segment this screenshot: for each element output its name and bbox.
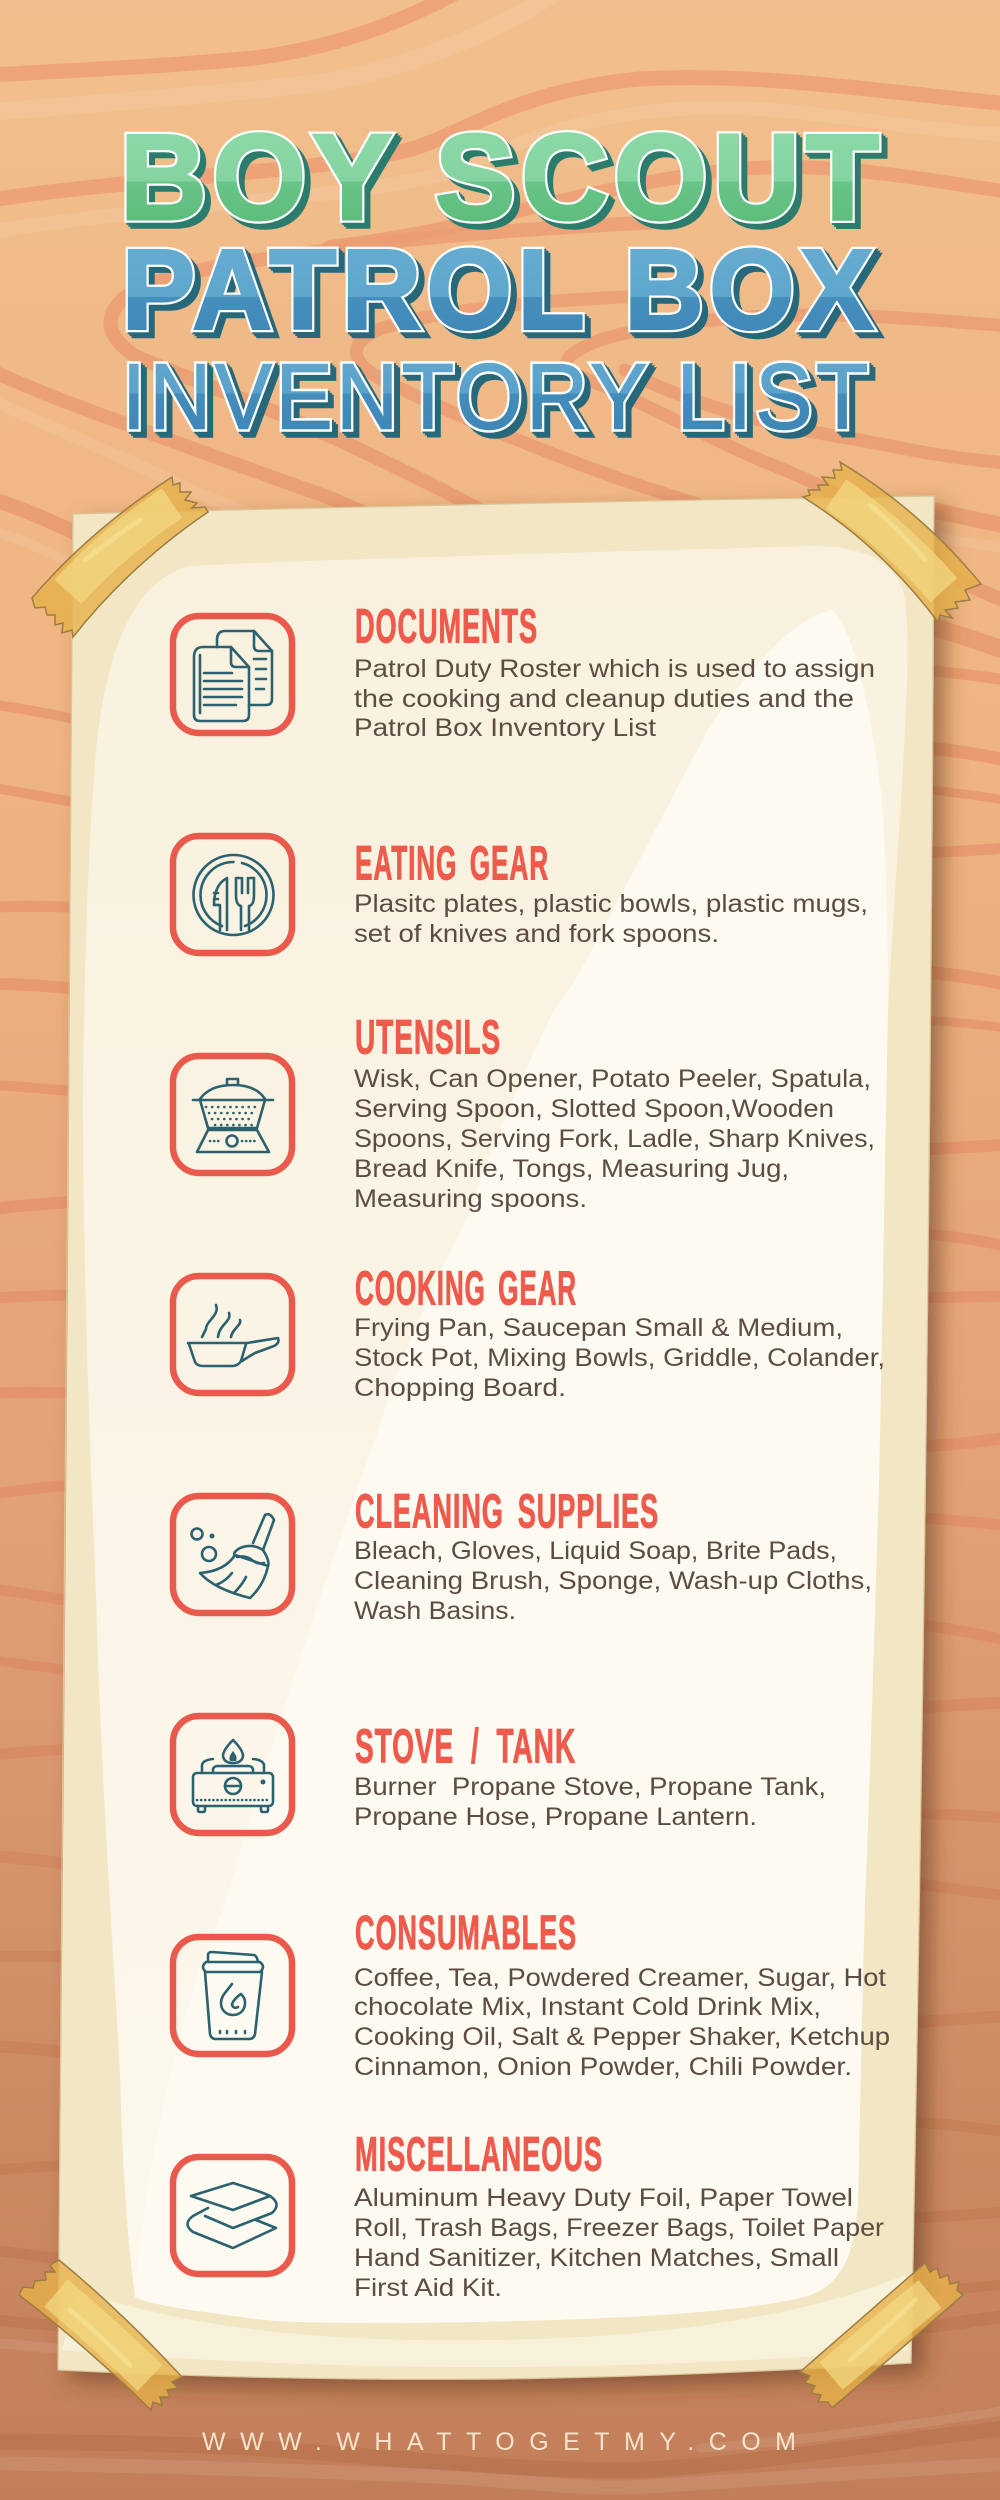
- tape: top left: [32, 477, 208, 637]
- text block: Roll, Trash Bags, Freezer Bags, Toilet Paper: [354, 2214, 884, 2242]
- section: cooking gear: [173, 1262, 885, 1402]
- text block: First Aid Kit.: [354, 2274, 502, 2302]
- title line: Boy Scout: BOY SCOUT: [122, 111, 887, 247]
- text block: [354, 2184, 884, 2302]
- text block: Cooking Oil, Salt & Pepper Shaker, Ketchup: [354, 2023, 890, 2051]
- text block: the cooking and cleanup duties and the: [354, 685, 854, 713]
- title line: Boy Scout: BOY SCOUT: [120, 109, 885, 245]
- text block: Hand Sanitizer, Kitchen Matches, Small: [354, 2244, 839, 2272]
- text block: Bleach, Gloves, Liquid Soap, Brite Pads,: [354, 1537, 837, 1565]
- icon: coffee cup: [173, 1937, 292, 2054]
- text block: [354, 1537, 872, 1625]
- icon: broom and bubbles: [173, 1496, 292, 1613]
- title line: Boy Scout: BOY SCOUT: [120, 109, 885, 245]
- heading: CONSUMABLES: [355, 1907, 577, 1960]
- heading: MISCELLANEOUS: [355, 2128, 603, 2182]
- text block: Coffee, Tea, Powdered Creamer, Sugar, Hot: [354, 1964, 886, 1992]
- text block: Bread Knife, Tongs, Measuring Jug,: [354, 1155, 789, 1183]
- text block: Measuring spoons.: [354, 1185, 587, 1213]
- heading: COOKING GEAR: [355, 1262, 577, 1316]
- tape: bottom right: [800, 2263, 963, 2408]
- text block: chocolate Mix, Instant Cold Drink Mix,: [354, 1993, 821, 2021]
- text block: [354, 1065, 875, 1213]
- text block: Wisk, Can Opener, Potato Peeler, Spatula,: [354, 1065, 871, 1093]
- text block: [354, 1964, 890, 2081]
- text block: Plasitc plates, plastic bowls, plastic mugs,: [354, 890, 868, 918]
- text block: Cleaning Brush, Sponge, Wash-up Cloths,: [354, 1567, 872, 1595]
- title line: Boy Scout: BOY SCOUT: [126, 115, 891, 251]
- text block: Patrol Box Inventory List: [354, 714, 656, 742]
- text block: Cinnamon, Onion Powder, Chili Powder.: [354, 2053, 852, 2081]
- heading: STOVE / TANK: [355, 1720, 576, 1774]
- icon: plate with knife and fork: [173, 836, 292, 953]
- section: cleaning supplies: [173, 1486, 872, 1625]
- icon: steamer pot: [173, 1056, 292, 1173]
- tape: top right: [803, 462, 981, 622]
- title line: Inventory List: INVENTORY LIST: [124, 346, 874, 450]
- text block: Burner Propane Stove, Propane Tank,: [354, 1773, 826, 1801]
- heading: UTENSILS: [355, 1012, 501, 1064]
- text block: [354, 1773, 826, 1831]
- heading: EATING GEAR: [355, 838, 549, 890]
- title line: Boy Scout: BOY SCOUT: [124, 113, 889, 249]
- title line: Inventory List: INVENTORY LIST: [122, 344, 872, 448]
- text block: Wash Basins.: [354, 1597, 516, 1625]
- text block: Spoons, Serving Fork, Ladle, Sharp Knives,: [354, 1125, 875, 1153]
- section: eating gear: [173, 836, 868, 953]
- title line: Inventory List: INVENTORY LIST: [122, 344, 872, 448]
- section: stove and tank: [173, 1716, 826, 1833]
- text block: [354, 655, 875, 742]
- text block: Propane Hose, Propane Lantern.: [354, 1803, 757, 1831]
- section: utensils: [173, 1012, 875, 1213]
- text block: [354, 1314, 885, 1402]
- title line: Patrol Box: PATROL BOX: [128, 232, 885, 358]
- text block: set of knives and fork spoons.: [354, 920, 719, 948]
- text block: Stock Pot, Mixing Bowls, Griddle, Colander,: [354, 1344, 885, 1372]
- icon: frying pan: [173, 1276, 292, 1393]
- text block: Serving Spoon, Slotted Spoon,Wooden: [354, 1095, 834, 1123]
- heading: DOCUMENTS: [355, 600, 538, 654]
- section: documents: [173, 600, 875, 742]
- icon: documents: [173, 616, 292, 733]
- title line: Patrol Box: PATROL BOX: [126, 230, 883, 356]
- text block: Chopping Board.: [354, 1374, 566, 1402]
- footer website: WWW.WHATTOGETMY.COM: [202, 2428, 796, 2456]
- title line: Patrol Box: PATROL BOX: [122, 226, 879, 352]
- title line: Inventory List: INVENTORY LIST: [128, 350, 878, 454]
- icon: gas stove: [173, 1716, 292, 1833]
- text block: Aluminum Heavy Duty Foil, Paper Towel: [354, 2184, 853, 2212]
- title line: Patrol Box: PATROL BOX: [124, 228, 881, 354]
- heading: CLEANING SUPPLIES: [355, 1486, 659, 1538]
- panel: paper sheet: [58, 496, 934, 2379]
- text block: [354, 890, 868, 948]
- tape: bottom left: [19, 2260, 182, 2410]
- text block: Frying Pan, Saucepan Small & Medium,: [354, 1314, 843, 1342]
- section: miscellaneous: [173, 2128, 884, 2302]
- title: [120, 109, 891, 454]
- title line: Patrol Box: PATROL BOX: [122, 226, 879, 352]
- section: consumables: [173, 1907, 890, 2081]
- icon: stacked paper towels: [173, 2157, 292, 2274]
- title line: Inventory List: INVENTORY LIST: [126, 348, 876, 452]
- text block: Patrol Duty Roster which is used to assign: [354, 655, 875, 683]
